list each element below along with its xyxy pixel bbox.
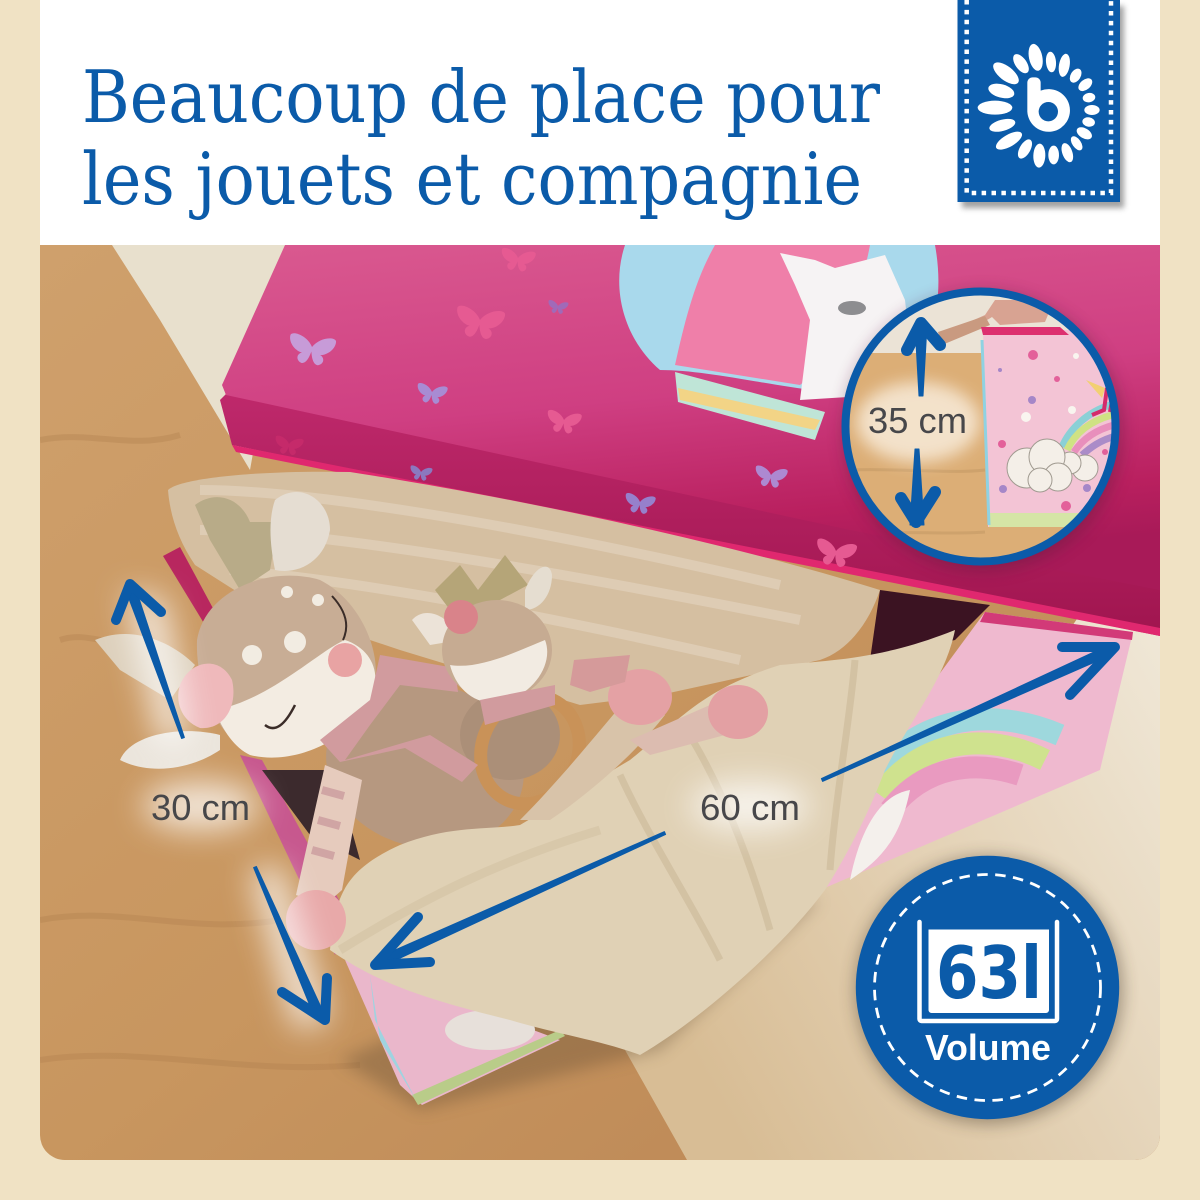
label: 35 cm: 35 cm <box>868 400 967 441</box>
arrow: 30 cm up <box>116 584 184 738</box>
muzzle <box>215 640 375 758</box>
storage box: inside dark <box>262 770 360 860</box>
inset stars <box>998 350 1108 511</box>
large deer left leg <box>296 765 362 905</box>
flower <box>178 664 233 728</box>
rug top left <box>112 245 290 470</box>
unicorn: head <box>780 253 910 400</box>
lid side edge <box>220 380 1160 636</box>
volume badge <box>855 856 1123 1124</box>
head <box>197 576 376 733</box>
title <box>82 55 881 221</box>
storage box: top-left rim <box>163 547 212 622</box>
label: 60 cm: 60 cm <box>700 787 800 828</box>
inset border <box>846 292 1116 562</box>
inset unicorn horn <box>1086 380 1105 398</box>
title: Beaucoup de place pour <box>82 55 881 139</box>
storage box: left wall strip <box>240 755 350 955</box>
inset toy leg <box>938 300 1050 340</box>
unicorn: rainbow <box>675 372 825 440</box>
plush legs <box>286 669 768 950</box>
ears <box>270 492 330 571</box>
plush deer bodies <box>326 685 566 844</box>
small body <box>460 700 560 780</box>
photo panel <box>40 245 1160 1160</box>
large deer body <box>326 685 524 844</box>
label: 30 cm: 30 cm <box>151 787 250 828</box>
small deer head <box>412 555 630 725</box>
header panel <box>40 0 1160 246</box>
arrow: 30 cm down <box>254 866 327 1020</box>
inset arrow up <box>907 323 940 396</box>
inset: height detail <box>840 285 1130 568</box>
inset glow <box>856 382 980 462</box>
large deer right leg <box>520 714 665 820</box>
arrow: 60 cm right <box>821 646 1115 781</box>
arrow glow <box>125 590 810 1030</box>
lid top <box>222 245 1160 590</box>
antlers <box>195 497 278 590</box>
box shadow <box>340 900 820 1110</box>
volume label: Volume <box>925 1027 1051 1068</box>
inset arrow down <box>901 449 935 525</box>
inset box <box>983 330 1130 527</box>
inset wall <box>840 285 1120 355</box>
box rainbow <box>865 719 1060 810</box>
storage box: right panel <box>820 612 1133 890</box>
beige woven cushion <box>168 472 880 705</box>
inset shadow <box>843 291 1123 571</box>
wood floor <box>40 245 1160 1160</box>
inset cloud <box>1007 439 1098 492</box>
rug bottom right <box>625 600 1160 1160</box>
storage box: front left panel <box>345 960 560 1105</box>
scarf <box>320 655 478 782</box>
large deer head <box>95 492 376 769</box>
volume value: 63l <box>936 931 1042 1015</box>
inset floor <box>840 353 1120 568</box>
inset rainbow <box>1062 405 1110 447</box>
arrow: 60 cm left <box>375 832 666 966</box>
cloth blanket <box>330 630 955 1055</box>
box icon <box>920 922 1057 1021</box>
brand logo tag <box>958 0 1124 208</box>
unicorn: mane <box>675 245 870 385</box>
lid butterflies <box>287 300 788 515</box>
unicorn: moon <box>619 245 938 395</box>
title: les jouets et compagnie <box>82 137 862 221</box>
small deer ring <box>474 690 566 809</box>
floral leg <box>638 706 723 755</box>
